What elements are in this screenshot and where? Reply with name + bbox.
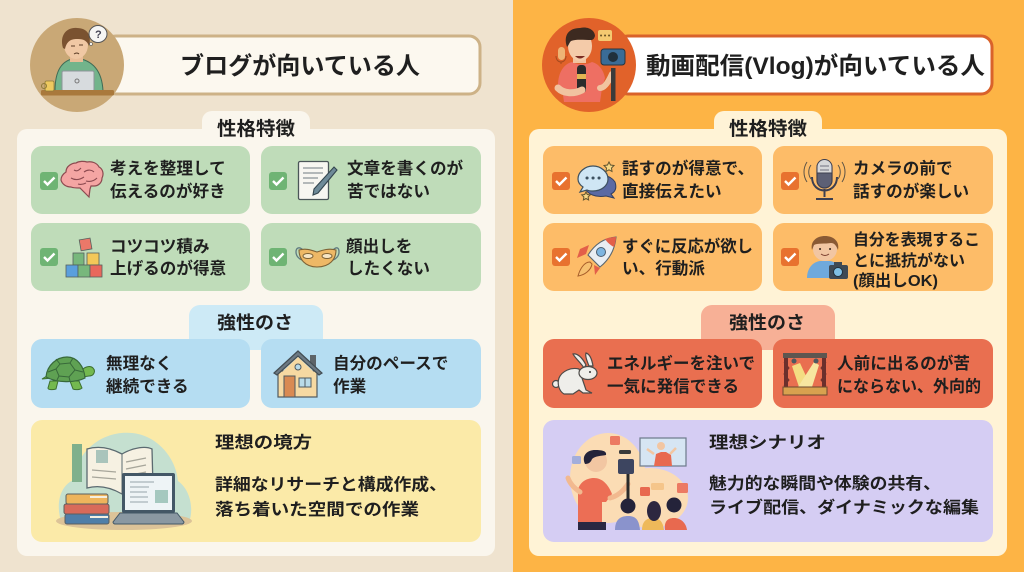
icon: speech bubbles	[578, 162, 616, 200]
trait card: organize thoughts: 伝えるのが好き	[110, 181, 226, 201]
icon: stacked blocks	[66, 238, 102, 277]
panel: vlog column	[529, 18, 1007, 556]
text: ideal environment detail: 落ち着いた空間での作業	[215, 499, 419, 519]
icon: document and pen	[298, 162, 337, 200]
strength card: continue: 継続できる	[106, 377, 189, 396]
text: ideal environment detail: 詳細なリサーチと構成作成、	[215, 474, 447, 494]
trait card: self expression: 自分を表現するこ	[853, 230, 980, 249]
strength card: energy: エネルギーを注いで	[607, 354, 755, 373]
strength card: own pace	[261, 339, 481, 408]
icon: house	[274, 351, 322, 397]
text: ideal scenario detail: ライブ配信、ダイナミックな編集	[709, 497, 979, 517]
ideal environment card	[31, 420, 481, 542]
strength tab	[701, 305, 835, 350]
trait card: fast reaction: すぐに反応が欲し	[622, 236, 753, 256]
vlog header title bar: 動画配信(Vlog)が向いている人	[646, 52, 985, 80]
trait card: camera talk	[773, 146, 993, 214]
heading: personality traits: 性格特徴	[217, 118, 295, 140]
text: ideal scenario: 理想シナリオ	[709, 433, 826, 452]
icon: rabbit	[552, 353, 597, 394]
trait card: self expression: とに抵抗がない	[853, 251, 965, 270]
trait card: camera talk: カメラの前で	[853, 159, 953, 178]
check icon	[40, 172, 58, 190]
blog header title bar: ブログが向いている人	[180, 52, 420, 80]
trait card: steady effort: 上げるのが得意	[110, 258, 227, 278]
trait card: good at talking: 直接伝えたい	[622, 182, 722, 201]
strength card: public: 人前に出るのが苦	[837, 353, 970, 373]
icon: mask	[296, 248, 339, 267]
icon: blogger avatar: ?	[95, 29, 102, 41]
trait card: not bad at writing	[261, 146, 481, 214]
check icon	[781, 172, 799, 190]
background: blog side	[0, 0, 511, 572]
trait card: steady effort: コツコツ積み	[110, 237, 210, 256]
trait card: no face: したくない	[347, 259, 430, 278]
strength card: continue: 無理なく	[106, 354, 172, 373]
illustration: vlogger and audience	[568, 433, 688, 530]
check icon	[552, 172, 570, 190]
check icon	[781, 248, 799, 266]
trait card: not bad at writing: 文章を書くのが	[347, 158, 464, 178]
cream content panel	[529, 111, 1007, 556]
check icon	[269, 172, 287, 190]
check icon	[552, 248, 570, 266]
icon: brain	[61, 161, 103, 197]
illustration: books and laptop	[56, 433, 192, 530]
icon: stage	[783, 353, 827, 395]
ideal scenario card	[543, 420, 993, 542]
strength card: continue	[31, 339, 250, 408]
text: ideal scenario detail: 魅力的な瞬間や体験の共有、	[709, 473, 941, 493]
trait card: camera talk: 話すのが楽しい	[853, 181, 969, 201]
strength tab	[189, 305, 323, 350]
background: vlog side	[513, 0, 1024, 572]
white content panel	[17, 111, 495, 556]
trait card: steady effort	[31, 223, 250, 291]
trait card: organize thoughts	[31, 146, 250, 214]
trait card: fast reaction	[543, 223, 762, 291]
text: ideal environment detail	[215, 474, 447, 519]
trait card: good at talking	[543, 146, 762, 214]
trait card: self expression: (顔出しOK)	[853, 272, 938, 290]
icon: rocket	[577, 237, 616, 276]
trait card: no face: 顔出しを	[346, 237, 412, 256]
strength card: energy	[543, 339, 762, 408]
trait card: organize thoughts: 考えを整理して	[110, 159, 226, 178]
icon: microphone	[804, 160, 845, 199]
vlog header title bar	[617, 36, 992, 94]
text: ideal scenario detail	[709, 473, 979, 517]
strength card: public: にならない、外向的	[837, 377, 981, 396]
icon: person with camera	[807, 236, 848, 279]
strength tab: 強性のさ	[729, 313, 805, 333]
strength card: own pace: 自分のペースで	[333, 353, 448, 373]
icon: vlogger avatar	[542, 18, 636, 112]
icon: blogger avatar	[30, 18, 124, 112]
blog header title bar	[105, 36, 480, 94]
check icon	[269, 248, 287, 266]
panel: blog column	[17, 18, 495, 556]
text: ideal environment: 理想の境方	[215, 432, 312, 452]
heading: personality traits: 性格特徴	[729, 118, 807, 140]
strength card: own pace: 作業	[333, 377, 367, 396]
trait card: no face	[261, 223, 481, 291]
trait card: good at talking: 話すのが得意で、	[622, 158, 754, 178]
strength tab: 強性のさ	[217, 313, 293, 333]
check icon	[40, 248, 58, 266]
icon: turtle	[42, 357, 94, 390]
strength card: public	[773, 339, 993, 408]
strength card: energy: 一気に発信できる	[607, 377, 739, 396]
trait card: not bad at writing: 苦ではない	[347, 181, 430, 201]
trait card: fast reaction: い、行動派	[622, 259, 705, 278]
trait card: self expression	[773, 223, 993, 291]
